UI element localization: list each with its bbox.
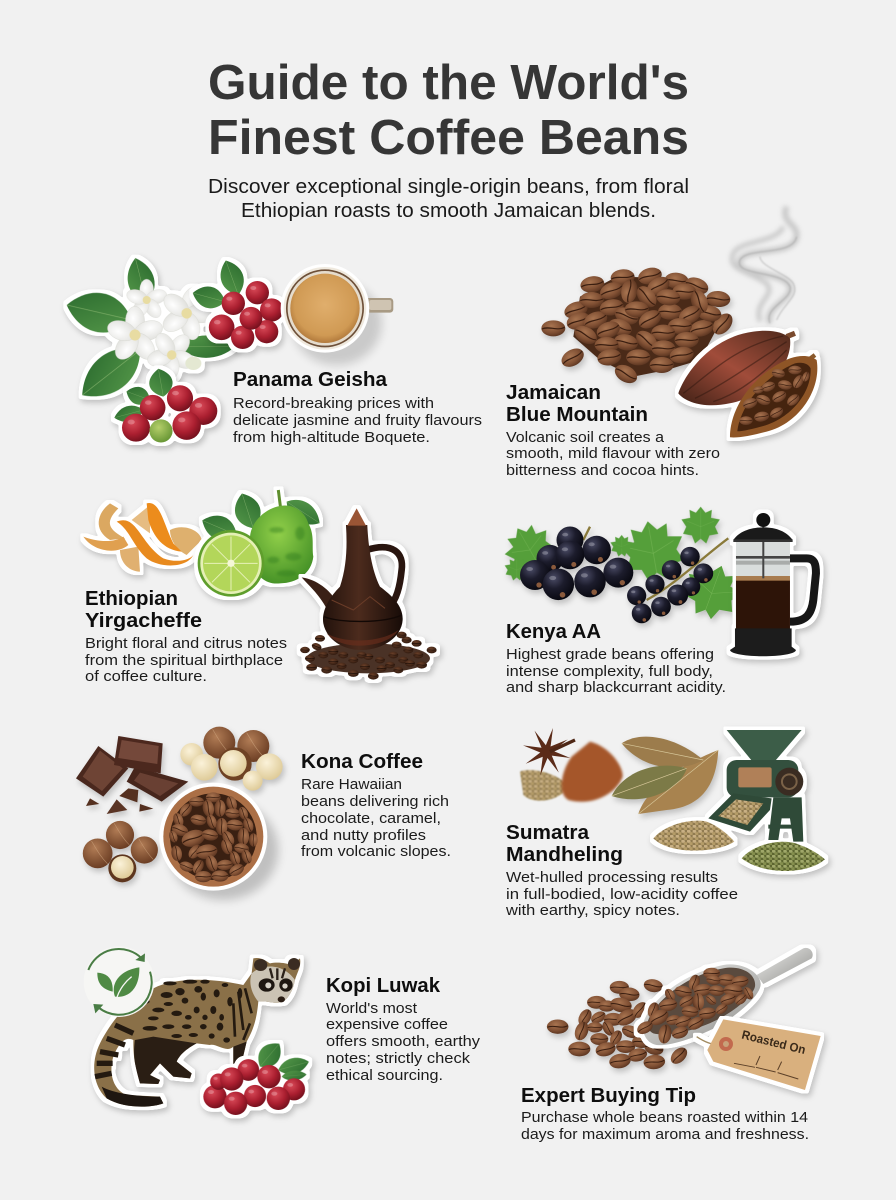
text: Jamaican Blue Mountain: Blue Mountain <box>506 404 648 426</box>
text: Kopi Luwak: World's most <box>326 1000 418 1017</box>
text: Kopi Luwak: offers smooth, earthy <box>326 1033 481 1050</box>
text: Ethiopian Yirgacheffe: of coffee culture. <box>85 668 207 685</box>
icon: recycling leaf badge <box>84 946 154 1017</box>
icon: coffee cherries <box>203 1037 311 1115</box>
panel: Kopi Luwak <box>84 946 481 1115</box>
text: Kenya AA: and sharp blackcurrant acidity. <box>506 679 726 696</box>
panel: Expert Buying Tip <box>521 948 821 1143</box>
text: Ethiopian Yirgacheffe: Bright floral and citrus notes <box>85 635 287 652</box>
icon: bowl shadow <box>168 800 278 900</box>
icon: chocolate pieces <box>76 736 188 814</box>
text: Kopi Luwak <box>326 975 481 1084</box>
panel: Ethiopian Yirgacheffe <box>83 490 437 685</box>
text: Kopi Luwak: expensive coffee <box>326 1016 448 1033</box>
panel: Kenya AA <box>497 507 816 696</box>
illustration: scoop, beans and tag <box>547 948 821 1090</box>
text: Kona Coffee: beans delivering rich <box>301 793 449 810</box>
icon: hulling machine with bean piles <box>653 730 825 871</box>
subtitle <box>208 176 689 222</box>
icon: price tag "Roasted On" <box>697 1019 821 1090</box>
text: Panama Geisha: Record-breaking prices with <box>233 395 434 412</box>
text: Jamaican Blue Mountain <box>506 382 720 479</box>
icon: cocoa pods <box>678 331 817 438</box>
header: title and subtitle <box>208 56 689 222</box>
panel: Panama Geisha <box>62 255 482 446</box>
icon: coffee bean pile <box>541 265 736 387</box>
text: Kona Coffee: chocolate, caramel, <box>301 810 441 827</box>
text: Kopi Luwak: notes; strictly check <box>326 1050 471 1067</box>
text: Sumatra Mandheling: Wet-hulled processing results <box>506 869 718 886</box>
text: Expert Buying Tip <box>521 1085 809 1143</box>
icon: coffee cup <box>281 264 393 353</box>
icon: macadamia nuts bottom <box>83 821 158 882</box>
text: Kona Coffee: Rare Hawaiian <box>301 776 402 793</box>
text: Panama Geisha <box>233 369 482 446</box>
illustration: beans, smoke and cocoa <box>541 207 817 438</box>
text: Sumatra Mandheling: in full-bodied, low-acidity coffee <box>506 886 738 903</box>
title: Guide to the World's <box>208 56 689 110</box>
illustration: jasmine, berries and cup <box>62 255 393 443</box>
icon: citrus peel <box>83 503 202 572</box>
icon: french press <box>730 513 816 656</box>
icon: spice pile <box>517 722 623 802</box>
text: Sumatra Mandheling: Sumatra <box>506 822 590 844</box>
illustration: civet, eco icon and cherries <box>84 946 311 1115</box>
text: Kona Coffee <box>301 751 451 860</box>
illustration: blackcurrants and french press <box>497 507 816 656</box>
text: Panama Geisha: delicate jasmine and fruity flavours <box>233 412 482 429</box>
icon: cup shadow <box>292 282 382 365</box>
text: Ethiopian Yirgacheffe: from the spiritual birthplace <box>85 652 283 669</box>
text: Ethiopian Yirgacheffe <box>85 588 287 685</box>
text: Kona Coffee: from volcanic slopes. <box>301 843 451 860</box>
icon: bowl of coffee beans <box>159 783 267 891</box>
text: Kona Coffee: and nutty profiles <box>301 827 426 844</box>
icon: bay leaves <box>612 737 718 814</box>
text: Kenya AA <box>506 621 726 696</box>
text: Ethiopian Yirgacheffe: Ethiopian <box>85 588 178 610</box>
panel: Kona Coffee <box>76 727 451 900</box>
text: Jamaican Blue Mountain: bitterness and cocoa hints. <box>506 462 699 479</box>
illustration: peel, bergamot and jebena <box>83 490 437 680</box>
text: Sumatra Mandheling: Mandheling <box>506 844 623 866</box>
icon: scattered beans <box>547 978 690 1070</box>
text: Kenya AA: intense complexity, full body, <box>506 663 713 680</box>
text: Kopi Luwak: Kopi Luwak <box>326 975 441 997</box>
text: Kona Coffee: Kona Coffee <box>301 751 423 773</box>
text: Jamaican Blue Mountain: Jamaican <box>506 382 601 404</box>
text: Panama Geisha: Panama Geisha <box>233 369 388 391</box>
icon: jasmine flowers with leaves <box>62 255 235 410</box>
text: Ethiopian Yirgacheffe: Yirgacheffe <box>85 610 202 632</box>
text: Kenya AA: Highest grade beans offering <box>506 646 714 663</box>
text: Sumatra Mandheling <box>505 822 738 919</box>
panel: Jamaican Blue Mountain <box>506 207 817 479</box>
illustration: chocolate, macadamia and bowl <box>76 727 283 900</box>
title: Finest Coffee Beans <box>208 111 689 165</box>
icon: price tag "Roasted On": Roasted On <box>740 1028 807 1057</box>
icon: red coffee cherries top <box>190 257 283 349</box>
text: Expert Buying Tip: days for maximum aroma and freshness. <box>521 1126 809 1143</box>
text: Kopi Luwak: ethical sourcing. <box>326 1067 443 1084</box>
subtitle: Discover exceptional single-origin beans, from floral <box>208 176 689 198</box>
text: Sumatra Mandheling: with earthy, spicy notes. <box>505 902 680 919</box>
illustration: spices, leaves and huller <box>517 722 825 871</box>
icon: jebena coffee pot with beans <box>300 508 437 680</box>
text: Jamaican Blue Mountain: Volcanic soil creates a <box>506 429 665 446</box>
title <box>208 56 689 165</box>
text: Expert Buying Tip: Purchase whole beans roasted within 14 <box>521 1109 808 1126</box>
text: Panama Geisha: from high-altitude Boquete. <box>233 429 430 446</box>
icon: civet <box>94 958 300 1107</box>
icon: coffee cherries lower <box>112 367 217 443</box>
subtitle: Ethiopian roasts to smooth Jamaican blends. <box>241 200 656 222</box>
text: Expert Buying Tip: Expert Buying Tip <box>521 1085 696 1107</box>
icon: metal scoop <box>635 948 813 1045</box>
icon: blackcurrant leaves and berries <box>497 507 748 626</box>
icon: bergamot and lime half <box>198 490 325 597</box>
icon: macadamia nuts top <box>180 727 283 791</box>
text: Kenya AA: Kenya AA <box>506 621 601 643</box>
text: Jamaican Blue Mountain: smooth, mild flavour with zero <box>506 445 720 462</box>
icon: steam <box>732 207 797 323</box>
panel: Sumatra Mandheling <box>505 722 825 919</box>
